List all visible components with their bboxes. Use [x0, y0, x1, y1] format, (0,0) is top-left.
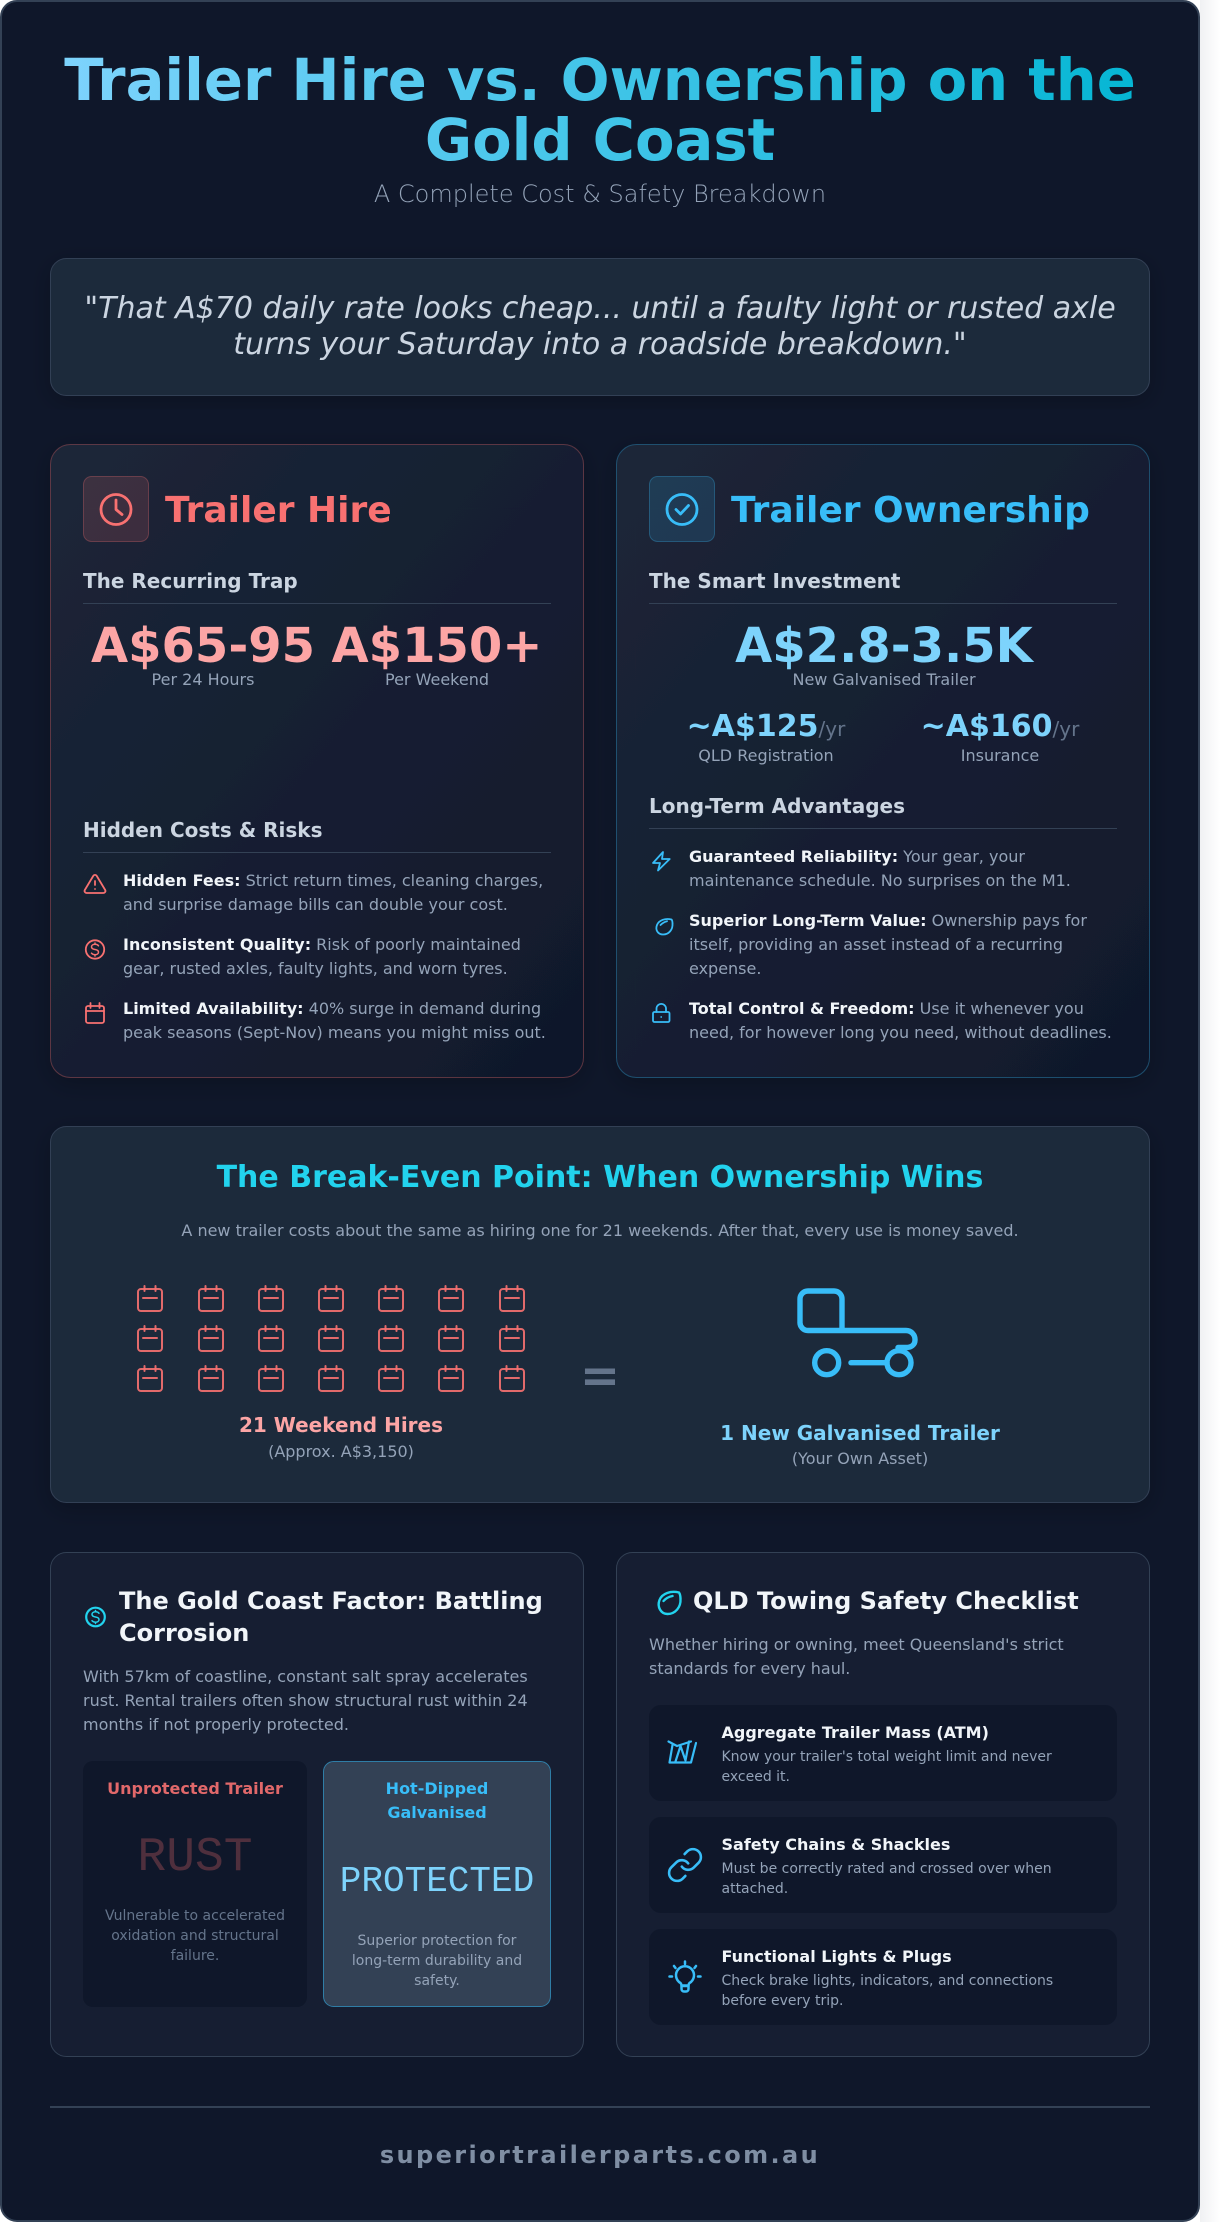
list item: limited availability: peak seasons (Sept-Nov) means you might miss out.: [123, 1023, 546, 1042]
panel: gold coast factor: [50, 1552, 584, 2056]
subtitle: A Complete Cost & Safety Breakdown: [374, 180, 826, 208]
checklist item: lights: Check brake lights, indicators, and connections: [722, 1973, 1053, 1989]
list item: control: Use it whenever you: [920, 999, 1084, 1018]
list item: long-term value: Superior Long-Term Value:: [689, 911, 927, 930]
heading: trailer ownership: Trailer Ownership: [731, 490, 1090, 531]
list item: limited availability: 40% surge in demand during: [309, 999, 541, 1018]
icon: clock: [84, 476, 148, 542]
list item: hidden fees: and surprise damage bills can double your cost.: [123, 895, 508, 914]
checklist item: chains: attached.: [722, 1881, 788, 1897]
heading: checklist: QLD Towing Safety Checklist: [693, 1587, 1079, 1615]
list item: long-term value: expense.: [689, 959, 761, 978]
list item: hidden fees: Strict return times, cleaning charges,: [246, 871, 543, 890]
quote text: "That A$70 daily rate looks cheap... until a faulty light or rusted axle: [84, 291, 1116, 326]
panel: break-even: [50, 1126, 1150, 1502]
icon grid: 21 calendars: [138, 1286, 524, 1391]
subheading: recurring trap: The Recurring Trap: [83, 569, 298, 593]
quote text: turns your Saturday into a roadside breakdown.": [233, 327, 967, 362]
list item: long-term value: itself, providing an asset instead of a recurring: [689, 935, 1063, 954]
title: Trailer Hire vs. Ownership on the: [64, 47, 1136, 114]
stat: new trailer price: New Galvanised Trailer: [792, 670, 976, 689]
stat: weekend hire price: A$150+: [332, 618, 542, 674]
icon: dollar circle: [86, 940, 104, 959]
quote panel: [50, 258, 1150, 396]
label: 21 weekend hires: [239, 1413, 443, 1461]
card: unprotected trailer: failure.: [171, 1948, 219, 1964]
description: checklist: standards for every haul.: [649, 1659, 850, 1678]
stat: insurance: Insurance: [961, 746, 1039, 765]
stat: new trailer price: A$2.8-3.5K: [735, 618, 1035, 674]
list item: inconsistent quality: Risk of poorly maintained: [316, 935, 521, 954]
icon: check circle: [650, 476, 714, 542]
icon: leaf: [656, 919, 673, 934]
icon: calendar: [86, 1003, 104, 1023]
card: hot-dipped galvanised: long-term durability and: [352, 1953, 522, 1969]
list item: control: need, for however long you need, without deadlines.: [689, 1023, 1112, 1042]
card: hot-dipped galvanised: PROTECTED: [340, 1861, 534, 1902]
footer website: superiortrailerparts.com.au: [380, 2141, 820, 2169]
heading: gold coast factor: The Gold Coast Factor: Battling: [119, 1587, 543, 1615]
checklist item: lights: Functional Lights & Plugs: [722, 1947, 952, 1966]
list item: inconsistent quality: gear, rusted axles, faulty lights, and worn tyres.: [123, 959, 508, 978]
description: break-even: A new trailer costs about the same as hiring one for 21 weekends. After that, every use is money saved.: [181, 1221, 1019, 1240]
list item: reliability: Your gear, your: [903, 847, 1025, 866]
card: unprotected trailer: RUST: [137, 1831, 253, 1885]
icon: lock: [653, 1004, 670, 1022]
checklist item: ATM: Know your trailer's total weight limit and never: [722, 1749, 1052, 1765]
icon: droplet: [659, 1592, 681, 1614]
checklist item: ATM: Aggregate Trailer Mass (ATM): [722, 1723, 989, 1742]
card: hot-dipped galvanised: Hot-Dipped: [386, 1779, 488, 1798]
label: new galvanised trailer: 1 New Galvanised Trailer: [720, 1421, 1000, 1445]
heading: gold coast factor: Corrosion: [119, 1619, 249, 1647]
card: unprotected trailer: Vulnerable to accelerated: [105, 1908, 285, 1924]
checklist item: chains: Must be correctly rated and crossed over when: [722, 1861, 1052, 1877]
list item: inconsistent quality: Inconsistent Quality:: [123, 935, 311, 954]
equals sign: =: [580, 1348, 620, 1404]
subheading: hidden costs: Hidden Costs & Risks: [83, 818, 323, 842]
checklist item: ATM: exceed it.: [722, 1769, 790, 1785]
icon: dollar circle cyan: [86, 1608, 105, 1626]
card: hot-dipped galvanised: Superior protection for: [358, 1933, 517, 1949]
subheading: long-term advantages: Long-Term Advantages: [649, 794, 905, 818]
card: hot-dipped galvanised: Galvanised: [387, 1803, 487, 1822]
stat: registration: [687, 709, 846, 765]
title: Gold Coast: [425, 107, 775, 174]
list item: reliability: Guaranteed Reliability:: [689, 847, 898, 866]
panel: trailer ownership: [616, 444, 1150, 1078]
card: hot-dipped galvanised: safety.: [414, 1973, 460, 1989]
stat: insurance: ~A$160/yr: [921, 709, 1080, 744]
label: 21 weekend hires: (Approx. A$3,150): [268, 1442, 414, 1461]
subheading: smart investment: The Smart Investment: [649, 569, 901, 593]
card: unprotected trailer: oxidation and structural: [111, 1928, 279, 1944]
stat: daily hire price: A$65-95: [91, 618, 315, 674]
checklist item: lights: before every trip.: [722, 1993, 843, 2009]
description: corrosion: With 57km of coastline, constant salt spray accelerates: [83, 1667, 528, 1686]
label: new galvanised trailer: [720, 1421, 1000, 1468]
list item: limited availability: Limited Availability:: [123, 999, 304, 1018]
checklist item: chains: [649, 1817, 1117, 1913]
list item: control: Total Control & Freedom:: [689, 999, 915, 1018]
icon: lightning bolt: [653, 852, 670, 870]
stat: registration: QLD Registration: [698, 746, 834, 765]
list item: reliability: maintenance schedule. No surprises on the M1.: [689, 871, 1071, 890]
description: checklist: Whether hiring or owning, meet Queensland's strict: [649, 1635, 1064, 1654]
icon: trailer: [800, 1291, 915, 1375]
card: unprotected trailer: Unprotected Trailer: [107, 1779, 283, 1798]
checklist item: lights: [649, 1929, 1117, 2025]
card: unprotected trailer: [83, 1761, 307, 2007]
card: hot-dipped galvanised: [324, 1762, 550, 2006]
stat: daily hire price: Per 24 Hours: [152, 670, 254, 689]
checklist item: ATM: [649, 1705, 1117, 1801]
panel: safety checklist: [616, 1552, 1150, 2056]
panel: trailer hire: [50, 444, 584, 1078]
checklist item: chains: Safety Chains & Shackles: [722, 1835, 950, 1854]
heading: break-even: The Break-Even Point: When Ownership Wins: [217, 1160, 983, 1195]
label: new galvanised trailer: (Your Own Asset): [792, 1449, 928, 1468]
list item: long-term value: Ownership pays for: [932, 911, 1087, 930]
stat: registration: ~A$125/yr: [687, 709, 846, 744]
list item: hidden fees: Hidden Fees:: [123, 871, 240, 890]
label: 21 weekend hires: 21 Weekend Hires: [239, 1413, 443, 1437]
stat: insurance: [921, 709, 1080, 765]
description: corrosion: rust. Rental trailers often show structural rust within 24: [83, 1691, 528, 1710]
stat: weekend hire price: Per Weekend: [385, 670, 489, 689]
heading: trailer hire: Trailer Hire: [165, 490, 392, 531]
description: corrosion: months if not properly protected.: [83, 1715, 349, 1734]
icon: warning triangle: [85, 875, 105, 893]
